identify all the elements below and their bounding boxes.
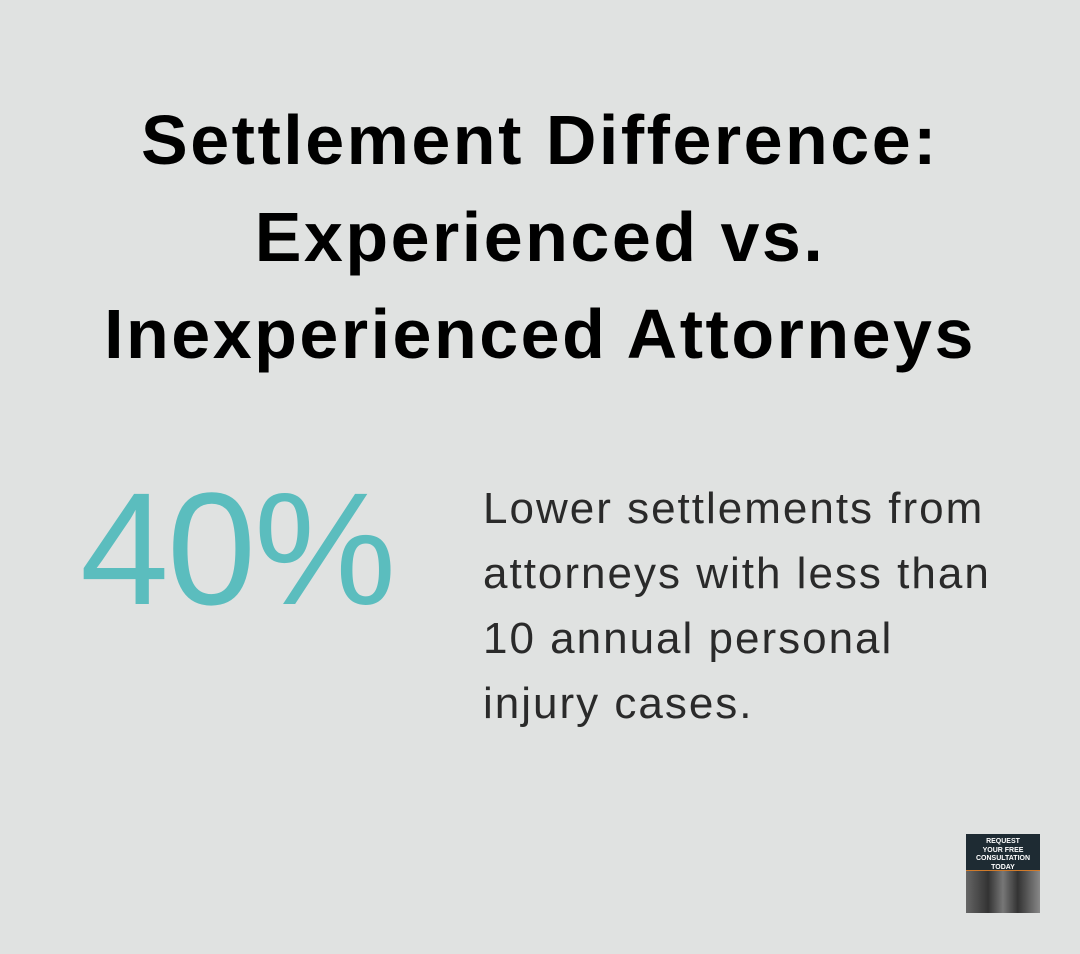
description text: injury cases. [483, 679, 754, 728]
title: Inexperienced Attorneys [104, 295, 976, 373]
description text: Lower settlements from [483, 484, 984, 533]
title: Settlement Difference: [141, 101, 939, 179]
description text: attorneys with less than [483, 549, 991, 598]
description text: 10 annual personal [483, 614, 893, 663]
big stat: 40% [80, 459, 394, 638]
badge: consultation [966, 834, 1040, 913]
description text [483, 484, 991, 728]
title [104, 101, 976, 373]
badge: consultation: YOUR FREE [983, 846, 1023, 854]
badge: consultation: CONSULTATION [976, 855, 1030, 862]
badge: consultation: REQUEST [986, 838, 1020, 845]
title: Experienced vs. [255, 198, 825, 276]
badge: consultation: TODAY [991, 864, 1015, 870]
